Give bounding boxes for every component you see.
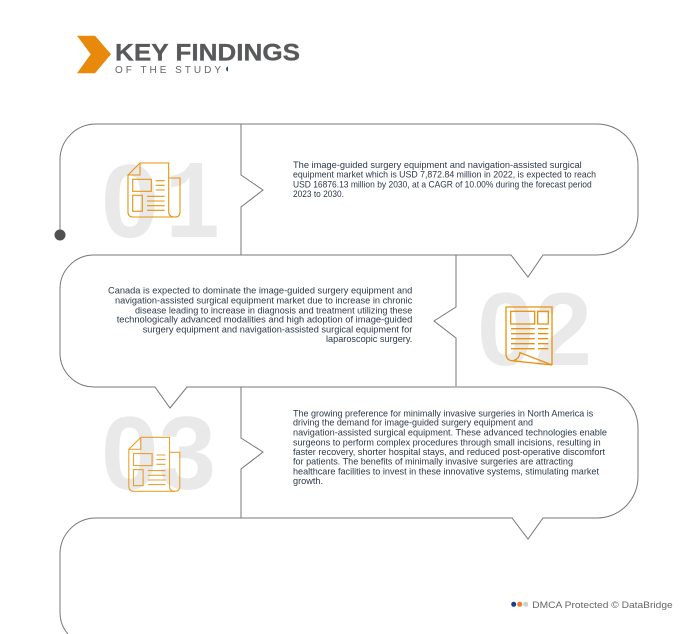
footer: DMCA watermark: DMCA Protected © DataBridge [532,600,673,611]
text block 2: surgery equipment and navigation-assisted surgical equipment for [143,325,412,336]
title: KEY FINDINGS [115,40,300,67]
subtitle: OF THE STUDY [115,65,221,76]
number 01: 1 [165,144,221,271]
text block 1 [293,160,596,200]
icon: document with curled corner [506,307,552,365]
text block 1: The image-guided surgery equipment and navigation-assisted surgical [293,160,582,171]
panel: finding 3 [101,396,607,512]
text block 3: faster recovery, shorter hospital stays, and reduced post-operative discomfort [293,447,605,458]
text block 2: laparoscopic surgery. [326,334,412,345]
text block 3: navigation-assisted surgical equipment. These advanced technologies enable [293,427,607,438]
icon: newspaper [129,437,180,491]
text block 1: equipment market which is USD 7,872.84 million in 2022, is expected to reach [293,170,596,181]
text block 2: disease leading to increase in diagnosis and treatment utilizing these [135,305,412,316]
panel: finding 1 outline [60,124,638,634]
icon: small teal mark [226,66,228,72]
number 01: 0 [101,144,159,260]
text block 3: surgeons to perform complex procedures through small incisions, resulting in [293,437,601,448]
number 01 [101,144,221,271]
text block 3: healthcare facilities to invest in these innovative systems, stimulating market [293,466,599,477]
text block 3: driving the demand for image-guided surgery equipment and [293,418,533,429]
icon: orange chevron [77,36,111,73]
panel: finding 1 [101,144,596,271]
text block 2 [108,285,413,345]
header [77,36,300,76]
number 03: 03 [101,396,216,512]
text block 1: 2023 to 2030. [293,189,344,200]
text block 3: The growing preference for minimally invasive surgeries in North America is [293,408,594,419]
text block 3: for patients. The benefits of minimally invasive surgeries are attracting [293,457,573,468]
timeline dot [54,230,66,240]
text block 2: Canada is expected to dominate the image-guided surgery equipment and [108,285,412,296]
number 02: 02 [477,272,592,388]
icon: newspaper [128,163,180,217]
text block 2: technologically advanced modalities and high adoption of image-guided [117,315,412,326]
text block 3: growth. [293,476,323,487]
panel: finding 2 [108,272,592,388]
text block 3 [293,408,607,487]
text block 2: navigation-assisted surgical equipment market due to increase in chronic [115,295,413,306]
text block 1: USD 16876.13 million by 2030, at a CAGR of 10.00% during the forecast period [293,179,592,190]
